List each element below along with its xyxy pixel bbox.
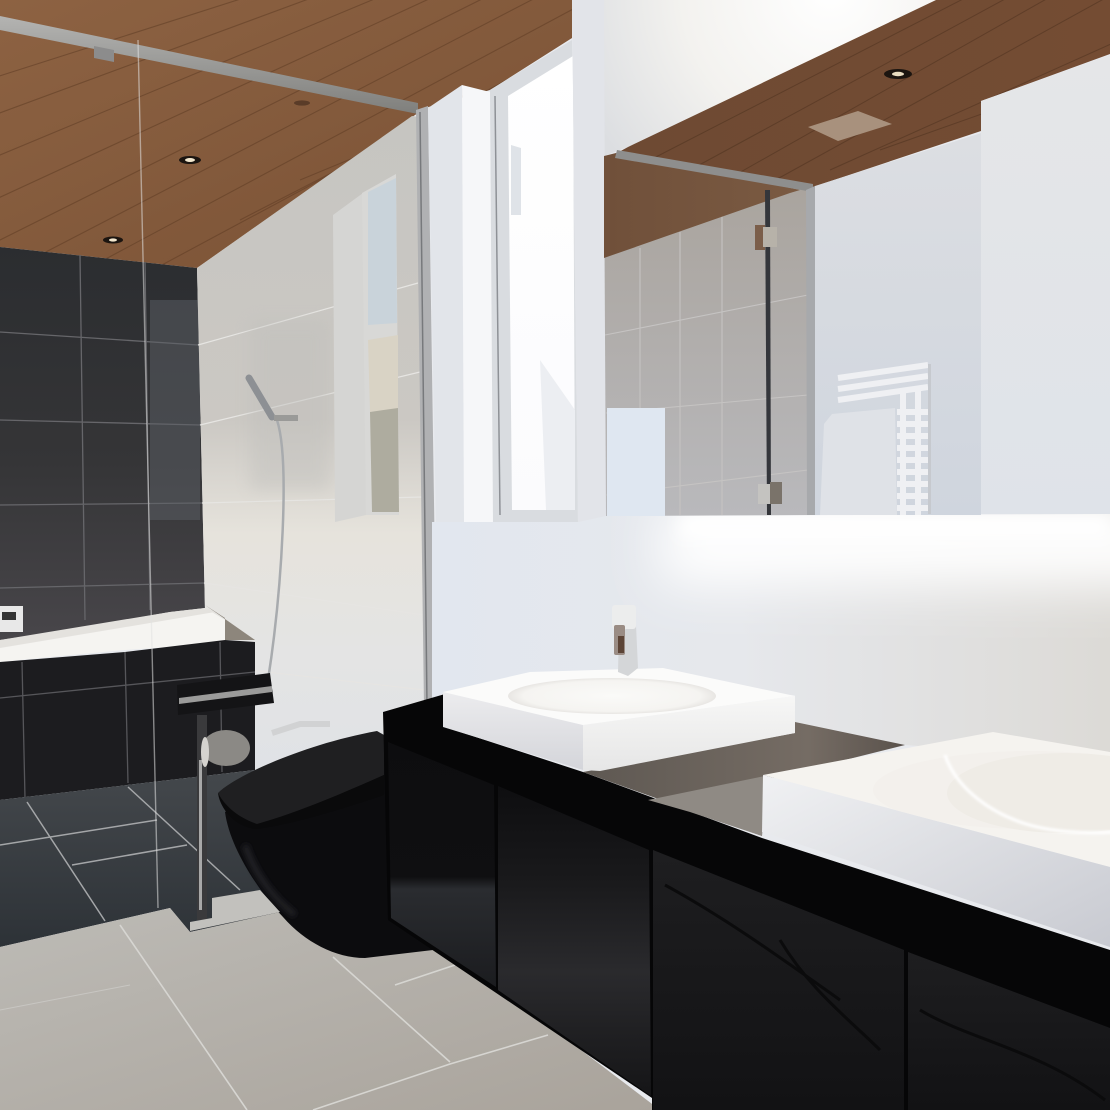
washbasin right — [762, 732, 1110, 947]
bathtub — [0, 605, 255, 800]
reflected tub — [607, 408, 665, 516]
reflected glass frame — [615, 150, 813, 192]
recessed downlights — [179, 156, 201, 164]
reflected towel — [820, 408, 897, 515]
shower head and hose — [249, 378, 298, 680]
wood ceiling — [0, 0, 600, 268]
faucet — [612, 605, 638, 676]
lower white wall — [432, 514, 1110, 760]
upper white wall — [572, 0, 938, 524]
vanity counter — [383, 694, 1110, 1110]
dark tile wall — [0, 247, 205, 640]
mirror — [604, 0, 1110, 516]
main floor — [0, 905, 660, 1110]
glass partition frame — [0, 16, 437, 908]
steel counter section — [583, 722, 905, 836]
reflected white walls — [815, 133, 981, 515]
wall tap — [272, 724, 330, 733]
reflected towel rail — [838, 365, 928, 515]
mirror reflected tiles — [604, 156, 813, 516]
dark shower floor — [0, 770, 285, 947]
reflected wood ceiling — [617, 0, 1110, 187]
tiled shower wall — [197, 116, 436, 790]
toilet — [218, 731, 433, 958]
washbasin left — [443, 668, 795, 771]
reflected wood ceiling behind glass — [604, 152, 800, 258]
toilet paper stand — [177, 673, 280, 931]
LED glow under mirror — [660, 505, 1110, 585]
cabinet doors — [388, 742, 1110, 1110]
window column and window — [428, 40, 578, 524]
